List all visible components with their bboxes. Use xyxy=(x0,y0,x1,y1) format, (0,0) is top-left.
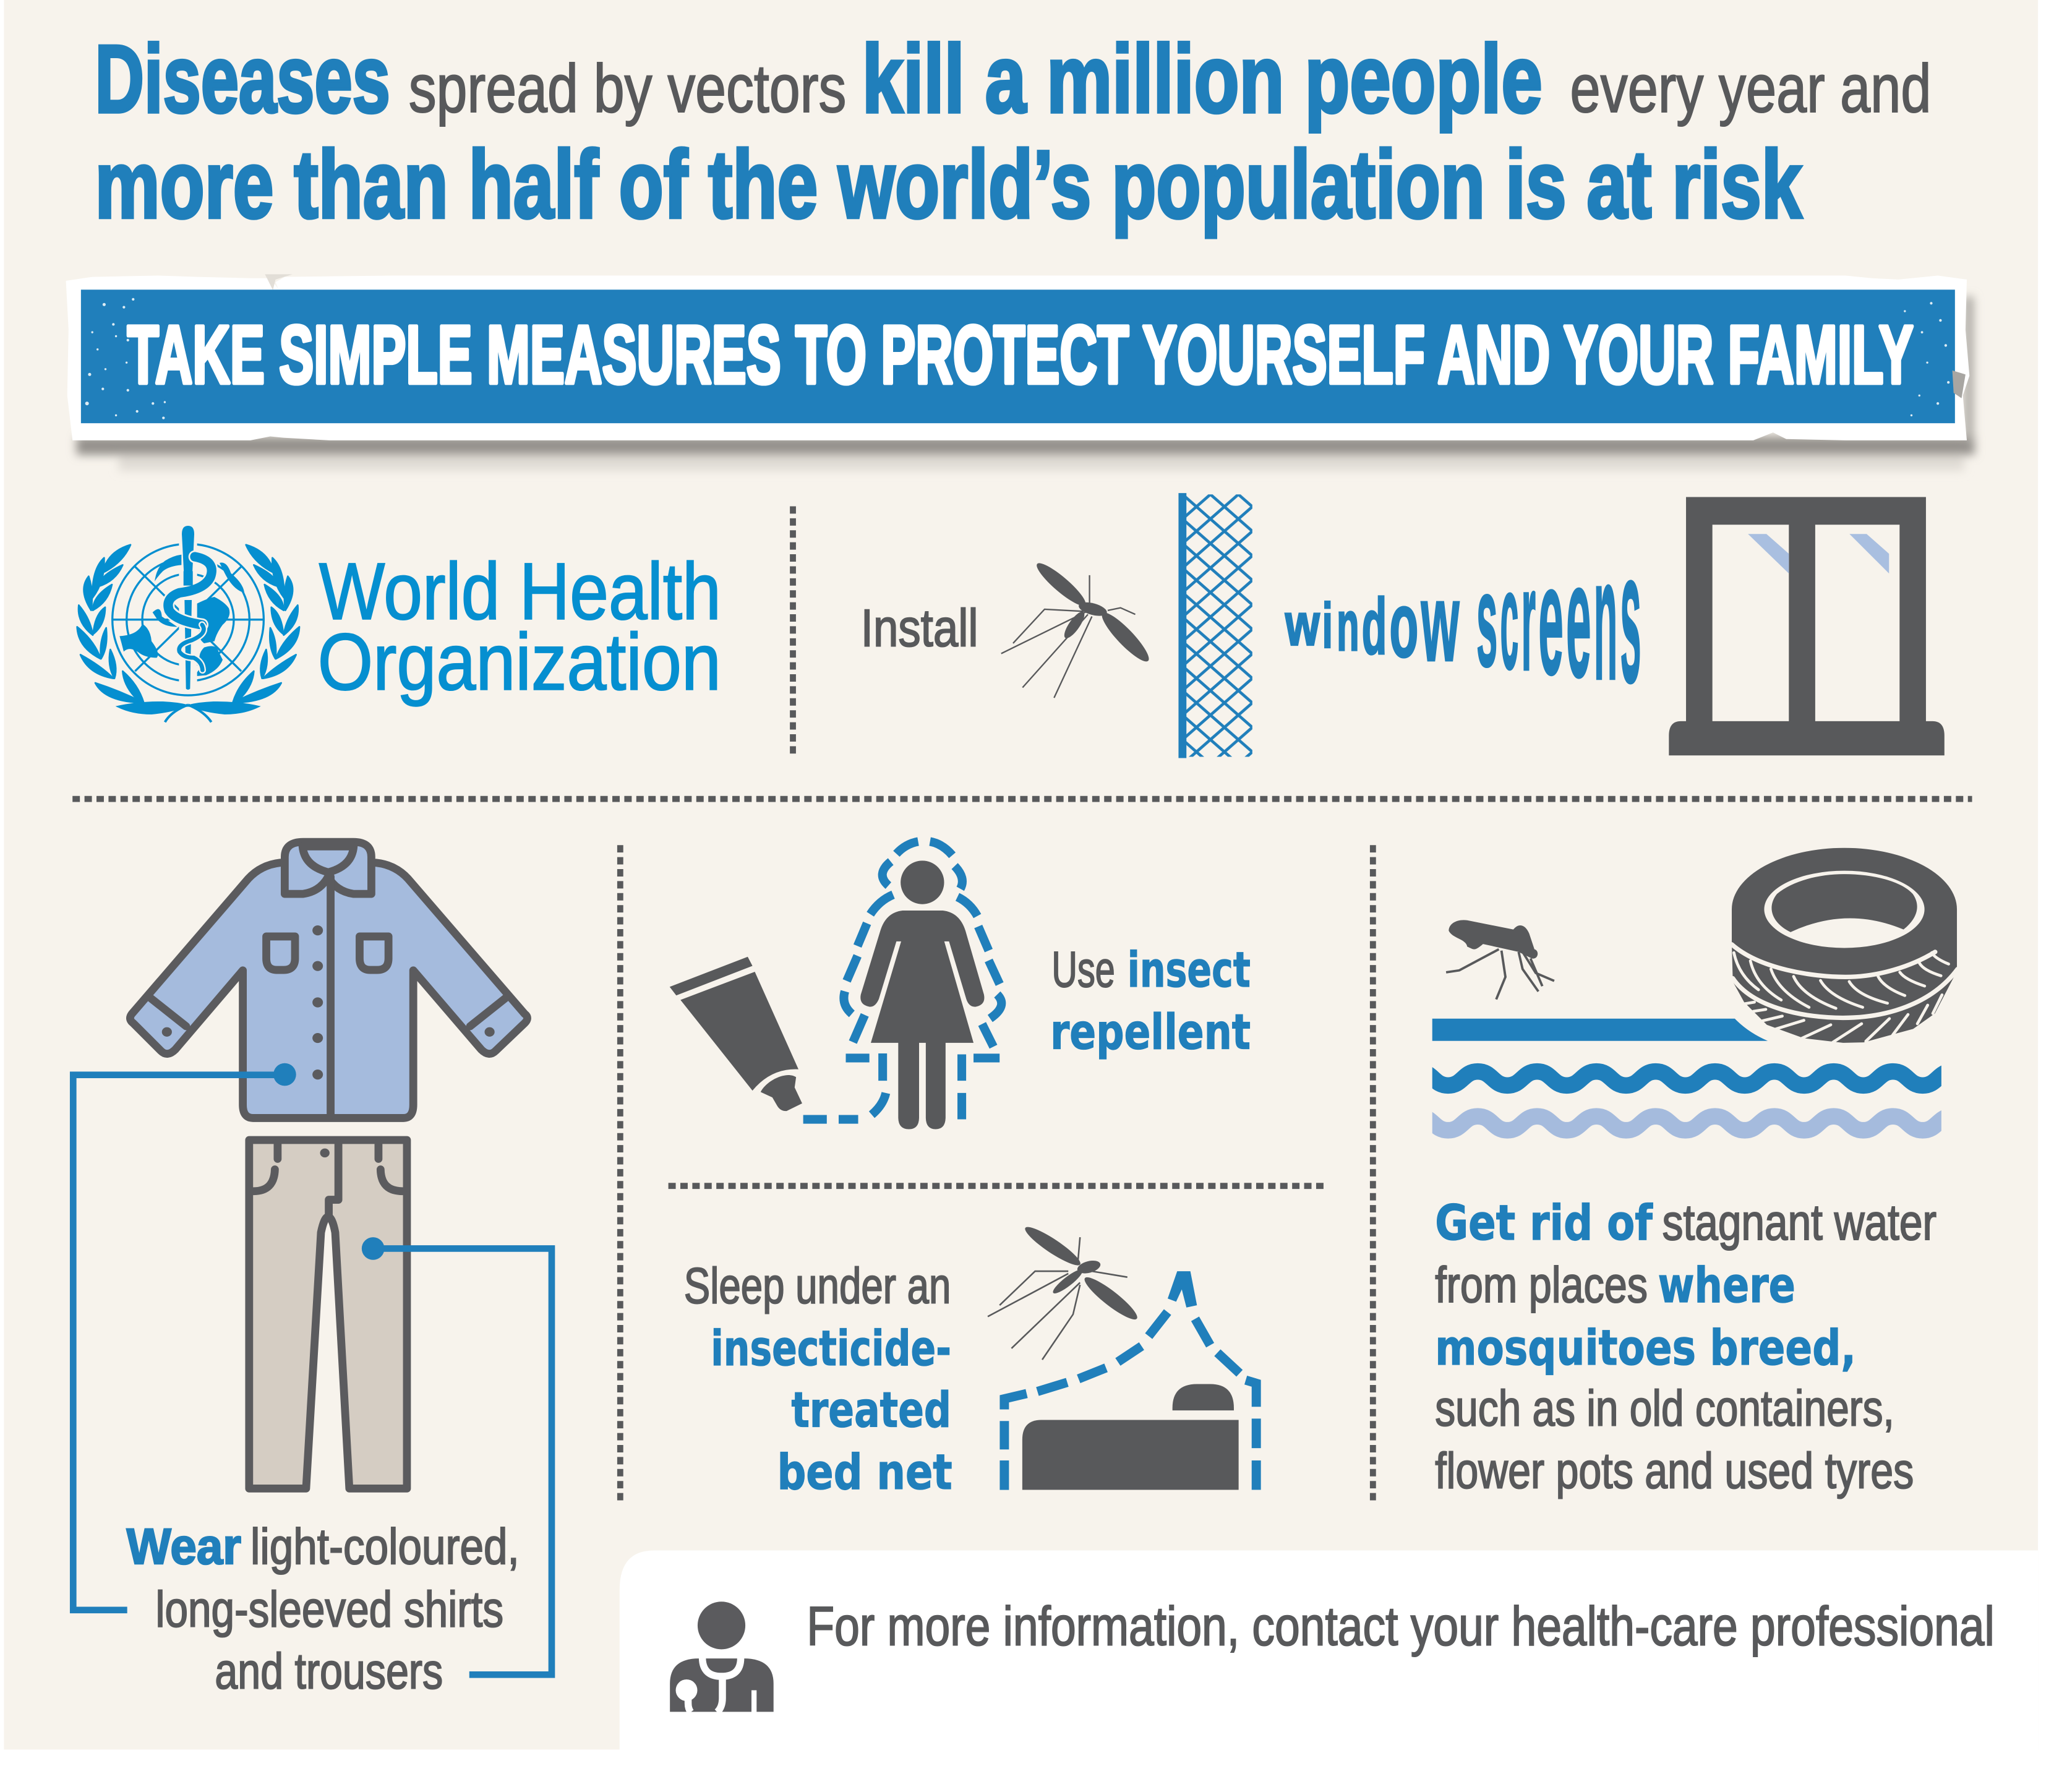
text: get rid of stagnant water: such as in old containers, xyxy=(1435,1381,1894,1437)
label: window screens in perspective: e xyxy=(1566,529,1591,711)
tear notch xyxy=(265,274,293,290)
horizontal divider xyxy=(72,797,1972,800)
text: wear: light-coloured, xyxy=(250,1519,520,1575)
label: Install: Install xyxy=(861,599,978,658)
continents xyxy=(119,563,244,676)
vertical divider top xyxy=(792,506,794,754)
icon: dark wave xyxy=(1418,1071,1953,1086)
vertical divider right xyxy=(1372,845,1374,1503)
label: window screens in perspective: e xyxy=(1538,533,1564,707)
panel: window screens: n xyxy=(1594,521,1617,716)
label: window screens in perspective: d xyxy=(1362,583,1387,671)
staff xyxy=(179,532,197,691)
text: get rid of stagnant water: Get rid of xyxy=(1435,1194,1653,1251)
icon: light wave xyxy=(1418,1117,1953,1130)
leader line right xyxy=(362,1237,552,1674)
text: get rid of stagnant water: mosquitoes breed, xyxy=(1435,1319,1856,1376)
vertical divider left xyxy=(619,845,622,1503)
ribbon xyxy=(116,701,261,714)
text: sleep under net: insecticide- xyxy=(711,1320,951,1377)
icon: dashed net xyxy=(1004,1271,1256,1490)
WHO name: Organization xyxy=(318,617,721,707)
text: use insect repellent xyxy=(1050,941,1251,1061)
title: every year and xyxy=(1570,51,1931,127)
text: wear: Wear xyxy=(127,1519,241,1575)
panel: window screens: s xyxy=(1620,513,1641,722)
text: wear xyxy=(127,1519,520,1699)
text: get rid of stagnant water: stagnant water xyxy=(1663,1194,1936,1251)
icon: person xyxy=(860,860,984,1130)
label: window screens in perspective: s xyxy=(1476,547,1497,694)
banner xyxy=(66,274,1975,471)
leader line left xyxy=(73,1063,296,1610)
serpent xyxy=(168,557,212,670)
WHO name xyxy=(318,546,721,707)
icon: water surface xyxy=(1432,1019,1768,1041)
panel: contact footer xyxy=(620,1551,2038,1792)
title: kill a million people xyxy=(862,25,1543,132)
text: sleep under net: Sleep under an xyxy=(684,1258,951,1314)
label: window screens in perspective: c xyxy=(1500,542,1518,698)
label: window screens in perspective: w xyxy=(1421,560,1460,684)
text: use insect repellent: Use xyxy=(1051,941,1115,998)
text: use insect repellent: repellent xyxy=(1050,1004,1251,1061)
panel: stagnant water xyxy=(1418,848,1958,1499)
title: spread by vectors xyxy=(409,51,846,127)
icon: doctor xyxy=(670,1601,774,1712)
laurel wreath left xyxy=(77,545,143,703)
icon: tube xyxy=(670,957,802,1111)
text: use insect repellent: insect xyxy=(1128,941,1251,998)
label: window screens in perspective: n xyxy=(1337,586,1359,666)
laurel wreath right xyxy=(233,545,299,703)
panel: clothing xyxy=(73,842,552,1699)
icon: mesh screen xyxy=(1183,493,1252,758)
WHO name: World Health xyxy=(319,546,721,637)
panel: bed net xyxy=(684,1222,1256,1501)
icon: mosquito above net xyxy=(988,1222,1141,1360)
panel: repellent xyxy=(670,841,1251,1130)
text: wear: and trousers xyxy=(215,1643,443,1699)
banner shadow xyxy=(77,297,1975,471)
label: window screens in perspective xyxy=(1285,513,1641,722)
icon: bed xyxy=(1022,1384,1239,1490)
text: wear: long-sleeved shirts xyxy=(156,1581,503,1637)
torn mark xyxy=(1953,371,1966,398)
icon: mosquito at screen xyxy=(1001,559,1154,698)
label: window screens in perspective: o xyxy=(1389,573,1418,676)
text: get rid of stagnant water xyxy=(1435,1194,1936,1499)
title xyxy=(95,25,1931,238)
blue strip xyxy=(81,289,1955,423)
text: sleep under net: treated xyxy=(791,1382,951,1439)
label: window screens in perspective: r xyxy=(1521,539,1536,701)
text: get rid of stagnant water: where xyxy=(1658,1257,1795,1314)
label: window screens in perspective: i xyxy=(1322,590,1333,661)
icon: tyre xyxy=(1732,848,1958,1043)
horizontal divider middle xyxy=(669,1185,1326,1187)
WHO emblem xyxy=(77,526,299,722)
label: window screens in perspective: w xyxy=(1285,591,1320,658)
torn white paper xyxy=(66,275,1969,440)
white panel xyxy=(620,1551,2038,1792)
text: sleep under net xyxy=(684,1258,952,1501)
icon: window xyxy=(1669,497,1945,755)
title: Diseases xyxy=(95,25,390,132)
icon: dashed repellent trail xyxy=(803,841,1001,1120)
text: sleep under net: bed net xyxy=(777,1444,952,1501)
icon: standing mosquito xyxy=(1446,920,1554,1000)
globe rings xyxy=(113,544,264,695)
icon: shirt xyxy=(130,842,528,1118)
panel: window screens xyxy=(861,493,1945,758)
grunge speckles xyxy=(85,298,1949,419)
text: get rid of stagnant water: from places xyxy=(1435,1257,1648,1313)
text: get rid of stagnant water: flower pots and used tyres xyxy=(1435,1443,1914,1499)
icon: trousers xyxy=(249,1140,407,1488)
WHO logo xyxy=(77,526,721,722)
